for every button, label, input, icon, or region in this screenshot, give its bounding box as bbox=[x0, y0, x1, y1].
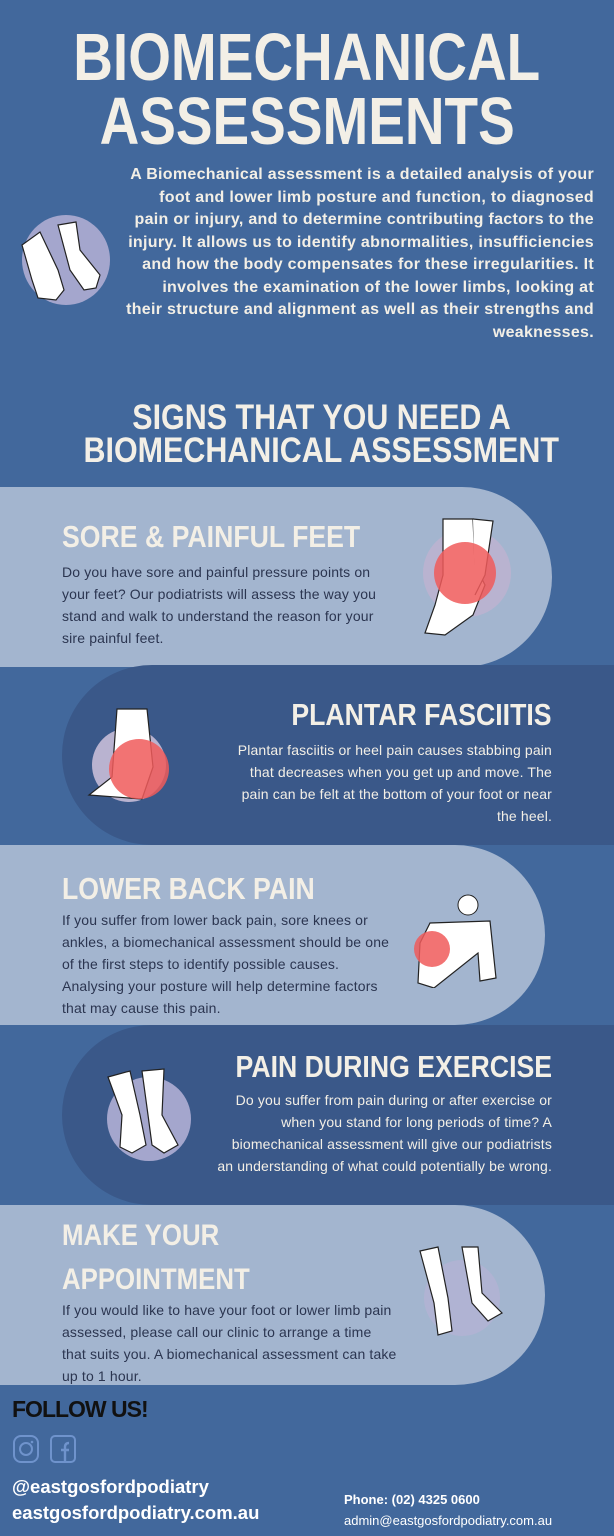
icon: instagram bbox=[13, 1435, 39, 1463]
panel: make your appointment bbox=[0, 1205, 545, 1385]
heading: APPOINTMENT bbox=[62, 1263, 250, 1296]
contact details: admin@eastgosfordpodiatry.com.au bbox=[344, 1513, 552, 1528]
social handle and website: @eastgosfordpodiatry bbox=[12, 1476, 209, 1497]
title: ASSESSMENTS bbox=[99, 84, 515, 159]
subtitle: SIGNS THAT YOU NEED A bbox=[132, 398, 510, 437]
panel: sore & painful feet bbox=[0, 487, 552, 667]
contact details: Phone: (02) 4325 0600 bbox=[344, 1492, 480, 1507]
social handle and website bbox=[12, 1476, 259, 1523]
title bbox=[74, 20, 540, 159]
heading bbox=[62, 1219, 250, 1296]
social handle and website: eastgosfordpodiatry.com.au bbox=[12, 1502, 259, 1523]
heading: PAIN DURING EXERCISE bbox=[235, 1049, 552, 1084]
panel: lower back pain bbox=[0, 845, 545, 1025]
text: If you suffer from lower back pain, sore knees or ankles, a biomechanical assessment should be one of the first steps to identify possible causes. Analysing your posture will help determine factors that may cause this pain. bbox=[62, 912, 389, 1016]
text: Plantar fasciitis or heel pain causes stabbing pain that decreases when you get up and move. The pain can be felt at the bottom of your foot or near the heel. bbox=[238, 742, 552, 824]
icon: heel pain bbox=[88, 708, 169, 802]
subtitle: BIOMECHANICAL ASSESSMENT bbox=[83, 431, 559, 470]
text: Do you suffer from pain during or after exercise or when you stand for long periods of time? A biomechanical assessment will give our podiatrists an understanding of what could potentially be wrong. bbox=[217, 1092, 552, 1174]
subtitle bbox=[83, 398, 559, 470]
heading: MAKE YOUR bbox=[62, 1219, 219, 1252]
panel: plantar fasciitis bbox=[62, 665, 614, 845]
icon: feet intro bbox=[21, 215, 110, 305]
text: If you would like to have your foot or lower limb pain assessed, please call our clinic to arrange a time that suits you. A biomechanical assessment can take up to 1 hour. bbox=[62, 1302, 396, 1384]
heading: SORE & PAINFUL FEET bbox=[62, 519, 360, 554]
contact details bbox=[344, 1492, 552, 1528]
heading: LOWER BACK PAIN bbox=[62, 871, 315, 906]
panel: pain during exercise bbox=[62, 1025, 614, 1205]
icon: foot pain bbox=[423, 518, 511, 636]
icon: facebook bbox=[50, 1435, 76, 1463]
icon: feet in sandals bbox=[419, 1246, 503, 1336]
heading: PLANTAR FASCIITIS bbox=[292, 697, 552, 732]
follow us heading: FOLLOW US! bbox=[12, 1396, 148, 1422]
title: BIOMECHANICAL bbox=[74, 20, 540, 95]
icon: back pain bbox=[414, 894, 497, 988]
icon: feet bbox=[107, 1068, 191, 1161]
intro text: A Biomechanical assessment is a detailed analysis of your foot and lower limb posture and function, to diagnosed pain or injury, and to determine contributing factors to the injury. It allows us to identify abnormalities, insufficiencies and how the body compensates for these irregularities. It involves the examination of the lower limbs, looking at their structure and alignment as well as their strengths and weaknesses. bbox=[126, 166, 594, 340]
text: Do you have sore and painful pressure points on your feet? Our podiatrists will assess the way you stand and walk to understand the reason for your sire painful feet. bbox=[62, 564, 376, 646]
